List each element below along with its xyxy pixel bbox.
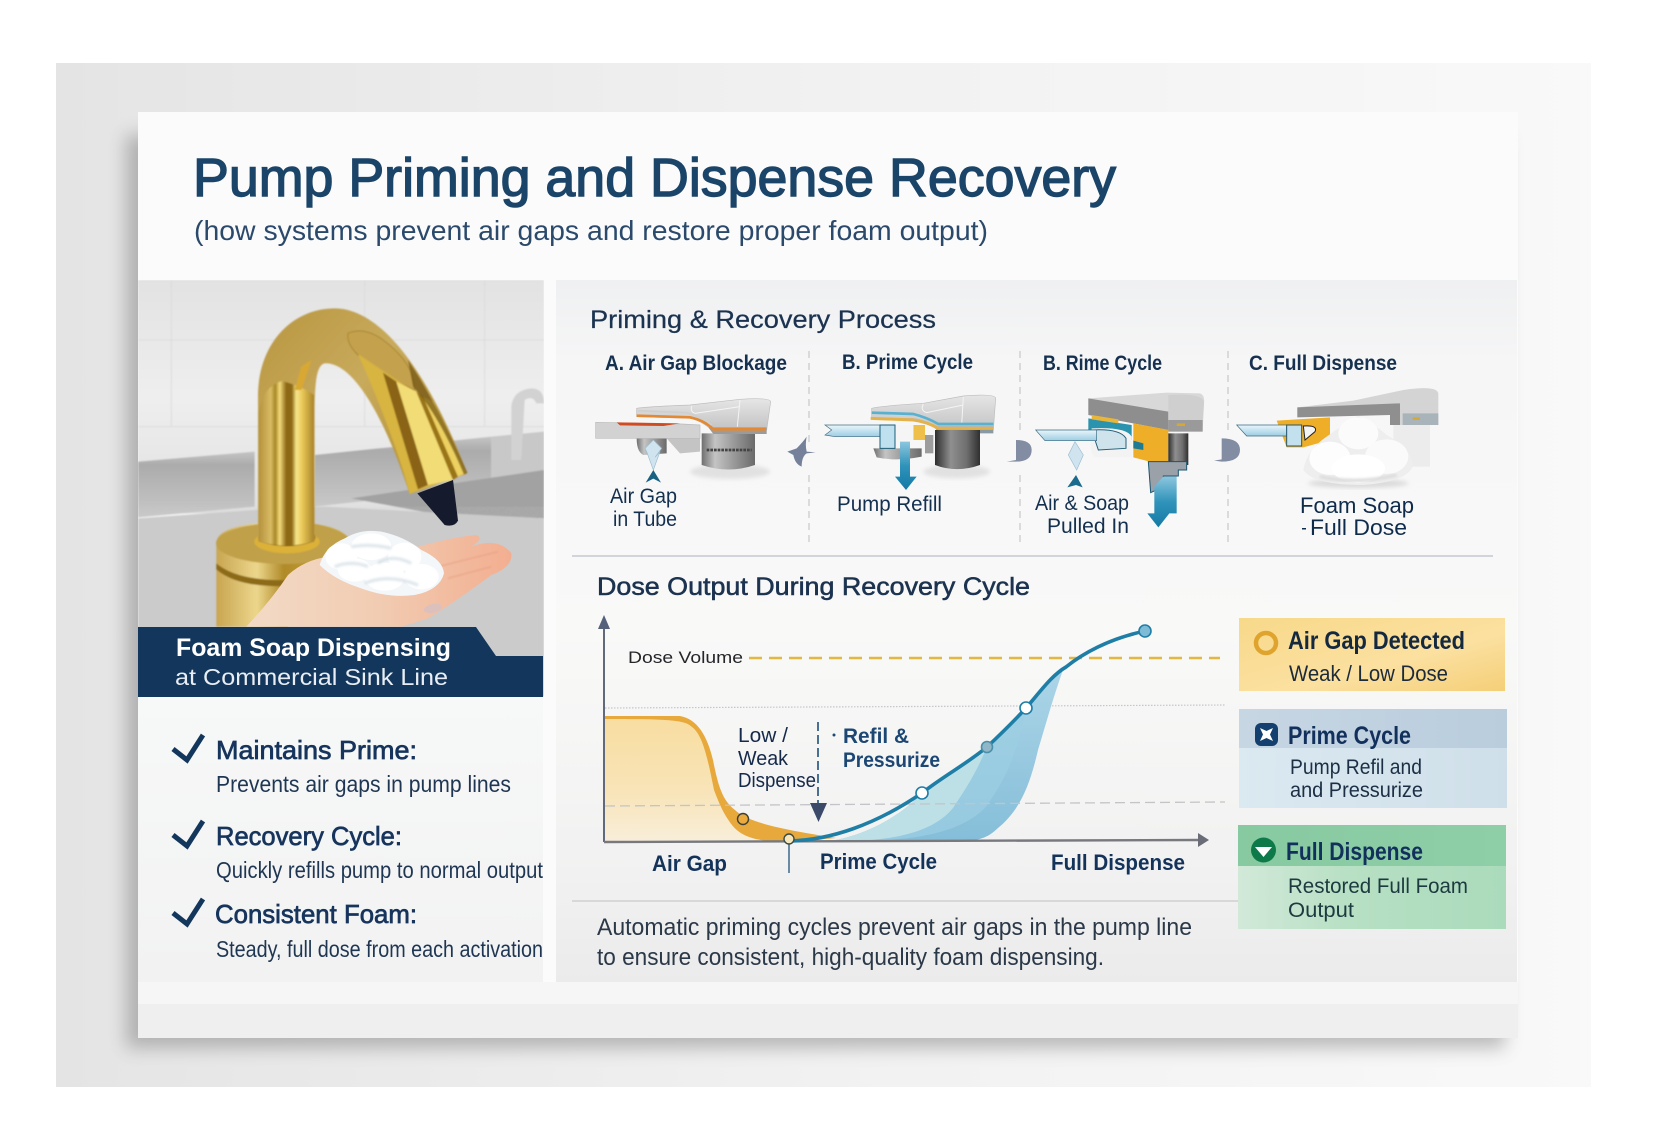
illustration: pump with air gap xyxy=(596,399,771,483)
illustration: full dose foam xyxy=(1237,388,1438,467)
benefit: consistent foam: Consistent Foam: xyxy=(215,899,417,929)
benefit: consistent foam xyxy=(173,899,543,962)
refill note: Refil & xyxy=(843,725,909,748)
legend: air gap detected: Weak / Low Dose xyxy=(1289,661,1448,686)
legend: air gap detected: Air Gap Detected xyxy=(1288,627,1465,655)
heading: dose output: Dose Output During Recovery Cycle xyxy=(597,573,1030,601)
label: air and soap pulled in xyxy=(1035,492,1129,538)
step heading A: A. Air Gap Blockage xyxy=(605,352,787,375)
x axis phases: Full Dispense xyxy=(1051,850,1185,875)
summary text: to ensure consistent, high-quality foam dispensing. xyxy=(597,944,1104,971)
black nozzle xyxy=(417,480,458,526)
step heading B prime: B. Prime Cycle xyxy=(842,351,973,374)
plateau area xyxy=(604,717,790,842)
photo: gold foam soap dispenser xyxy=(138,280,544,697)
axes xyxy=(603,628,605,842)
blue response curve xyxy=(790,631,1145,841)
legend: air gap detected xyxy=(1239,618,1505,691)
low weak dispense note: Low / xyxy=(738,725,788,747)
benefit: recovery cycle xyxy=(173,821,544,883)
faucet base xyxy=(216,522,351,627)
refill note: Pressurize xyxy=(843,749,940,772)
x axis phases: Prime Cycle xyxy=(820,849,937,874)
photo caption banner xyxy=(138,627,543,697)
legend: full dispense xyxy=(1238,825,1506,929)
hand xyxy=(246,535,511,627)
refill note xyxy=(832,725,940,772)
low weak dispense note xyxy=(738,725,816,792)
legend: prime cycle: Prime Cycle xyxy=(1288,722,1411,750)
benefit: consistent foam: Steady, full dose from each activation xyxy=(216,936,543,962)
card shadow xyxy=(126,135,1505,1048)
faucet spout xyxy=(258,308,467,546)
illustration: pump drawing air and soap xyxy=(1036,393,1204,527)
legend: prime cycle: and Pressurize xyxy=(1290,779,1423,802)
heading: priming process: Priming & Recovery Process xyxy=(590,306,936,334)
summary text xyxy=(597,914,1192,971)
dose volume label: Dose Volume xyxy=(628,648,743,667)
benefit: recovery cycle: Recovery Cycle: xyxy=(216,821,402,851)
label: foam soap full dose xyxy=(1300,493,1414,540)
arrow connector B to B xyxy=(1007,440,1032,462)
label: foam soap full dose: Full Dose xyxy=(1310,515,1407,540)
step heading B rime: B. Rime Cycle xyxy=(1043,352,1162,375)
arrow connector A to B xyxy=(787,437,816,467)
poster card xyxy=(138,112,1518,1038)
summary text: Automatic priming cycles prevent air gaps in the pump line xyxy=(597,914,1192,941)
arrow connector B to C xyxy=(1214,438,1240,462)
illustration: pump refill xyxy=(825,395,996,490)
x axis phases: Air Gap xyxy=(652,851,727,876)
title: Pump Priming and Dispense Recovery xyxy=(193,148,1116,208)
benefit: recovery cycle: Quickly refills pump to normal output xyxy=(216,857,544,883)
label: air and soap pulled in: Air & Soap xyxy=(1035,492,1129,515)
legend: prime cycle: Pump Refil and xyxy=(1290,756,1422,779)
foam on palm xyxy=(320,531,444,596)
panel: left benefits xyxy=(138,697,543,982)
step heading C: C. Full Dispense xyxy=(1249,352,1397,375)
benefit: maintains prime xyxy=(173,735,511,797)
x axis phases xyxy=(652,849,1185,876)
blue inner area xyxy=(830,747,987,841)
label: air gap in tube xyxy=(610,485,677,531)
legend: full dispense: Full Dispense xyxy=(1286,838,1423,866)
blue mid layer xyxy=(830,708,1026,841)
low weak dispense note: Dispense xyxy=(738,770,816,792)
label: pump refill: Pump Refill xyxy=(837,493,942,516)
foam pile xyxy=(1303,416,1413,488)
legend: prime cycle xyxy=(1239,709,1507,808)
label: air and soap pulled in: Pulled In xyxy=(1047,515,1129,538)
benefit: maintains prime: Prevents air gaps in pump lines xyxy=(216,771,511,797)
subtitle: (how systems prevent air gaps and restore proper foam output) xyxy=(194,215,988,246)
photo caption banner: at Commercial Sink Line xyxy=(175,664,448,690)
photo caption banner: Foam Soap Dispensing xyxy=(176,634,451,662)
chart: dose output curve xyxy=(598,615,1225,876)
blue outer area xyxy=(830,670,1063,841)
benefit: maintains prime: Maintains Prime: xyxy=(216,735,417,765)
label: air gap in tube: Air Gap xyxy=(610,485,677,508)
panel: process and chart xyxy=(556,280,1517,982)
legend: full dispense: Output xyxy=(1288,899,1354,922)
label: air gap in tube: in Tube xyxy=(613,508,677,531)
low dose arrow xyxy=(810,722,827,822)
orange drop band xyxy=(604,716,836,842)
label: foam soap full dose: Foam Soap xyxy=(1300,493,1414,518)
target dose line xyxy=(749,657,1220,659)
legend: full dispense: Restored Full Foam xyxy=(1288,875,1468,898)
low weak dispense note: Weak xyxy=(738,748,789,770)
